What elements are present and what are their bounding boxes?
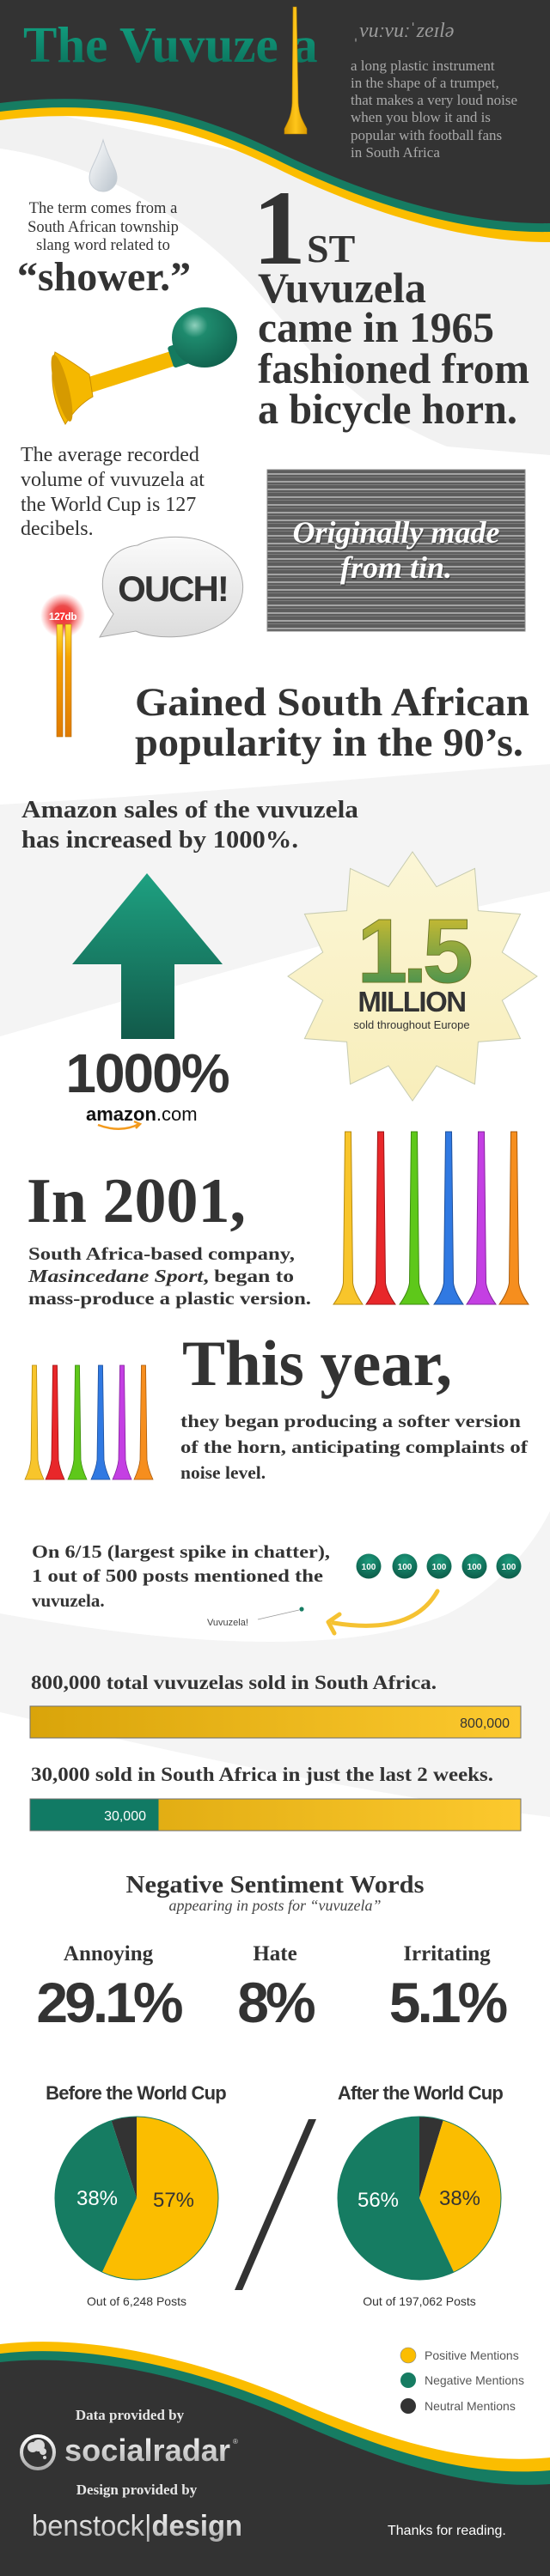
badge: 1.5 million: sold throughout Europe [353,1018,470,1031]
icon: bicycle horn [47,307,237,424]
badge: 1.5 million: 1.5 [357,901,471,1002]
text: this year [180,1328,529,1483]
text: first vuvuzela: ST [307,227,355,270]
definition: a long plastic instrument [351,58,495,74]
text: first vuvuzela: 1 [253,169,306,287]
heading: gained popularity [135,680,529,765]
stats: sentiment words: Irritating [403,1942,491,1965]
legend: Positive Mentions [425,2348,519,2362]
text: 6/15 spike: vuvuzela. [32,1590,105,1611]
text: amazon sales: has increased by 1000%. [21,827,298,854]
heading: negative sentiment words: Negative Sentiment Words [125,1871,425,1899]
text: first vuvuzela: fashioned from [258,344,529,392]
text: this year: of the horn, anticipating complaints of [180,1437,529,1457]
definition [351,20,517,161]
text: amazon sales: Amazon sales of the vuvuzela [21,797,358,823]
text: average volume [21,444,205,540]
bar chart: 800,000 total: 800,000 total vuvuzelas sold in South Africa. [31,1672,437,1693]
definition: when you blow it and is [351,109,491,125]
text: average volume: the World Cup is 127 [21,494,196,516]
icon: six colored vuvuzelas [333,1132,529,1304]
text: shower origin: The term comes from a [29,200,177,217]
badge: 1.5 million [288,852,537,1101]
definition: in the shape of a trumpet, [351,75,499,91]
panel: originally made from tin [267,470,525,631]
icon: socialradar logo [21,2436,54,2469]
icon: 100-post coins: 100 [432,1563,447,1572]
icon: decibel meter [40,593,85,737]
text: 6/15 spike: On 6/15 (largest spike in chatter), [32,1541,330,1562]
text: in 2001: In 2001, [27,1166,246,1236]
stats: sentiment words: 29.1% [36,1971,182,2034]
definition: in South Africa [351,144,440,161]
panel: originally made from tin: Originally made [292,515,500,550]
text: shower origin: South African township [28,219,179,236]
stats: sentiment words: 8% [237,1971,315,2034]
text: in 2001: mass-produce a plastic version. [28,1288,311,1309]
text: 6/15 spike: 1 out of 500 posts mentioned the [32,1565,323,1586]
title [23,7,318,134]
icon: small colored vuvuzelas [25,1365,153,1479]
footer: data credit socialradar [21,2407,238,2469]
callout: vuvuzela dot: Vuvuzela! [207,1618,248,1628]
pie chart: after the world cup [338,2082,503,2308]
badge: 1.5 million: MILLION [358,986,466,1018]
text: in 2001: Masincedane Sport , began to [28,1266,294,1286]
pie chart: after the world cup: Out of 197,062 Posts [363,2294,476,2308]
pie chart: before the world cup: Before the World Cup [46,2082,226,2104]
icon: 100-post coins: 100 [468,1563,482,1572]
bar chart: 30,000 last 2 weeks [30,1764,521,1831]
pie chart: before the world cup: Out of 6,248 Posts [87,2294,186,2308]
definition: popular with football fans [351,127,502,143]
stat: 1000% amazon: 1000% [65,1042,229,1104]
footer band [0,2342,550,2576]
pie chart: after the world cup: After the World Cup [338,2082,503,2104]
footer: design credit benstock: benstock|design [32,2510,242,2543]
footer: design credit benstock [32,2482,242,2543]
panel: originally made from tin: from tin. [340,550,452,585]
legend: Negative Mentions [425,2373,524,2387]
text: shower origin [17,200,191,300]
panel: originally made from tin: Originally made [294,517,501,551]
legend: Neutral Mentions [425,2399,516,2413]
bar chart: 30,000 last 2 weeks: 30,000 sold in South Africa in just the last 2 weeks. [31,1764,493,1785]
stats: sentiment words: Annoying [64,1942,154,1965]
text: this year: This year, [182,1328,452,1400]
definition: that makes a very loud noise [351,92,517,108]
footer: data credit socialradar: Data provided by [76,2407,185,2423]
heading: negative sentiment words: appearing in posts for “vuvuzela” [168,1897,382,1914]
panel: originally made from tin: from tin. [341,552,453,586]
icon: 100-post coins: 100 [398,1563,412,1572]
icon: water drop [89,140,117,191]
text: average volume: volume of vuvuzela at [21,469,205,491]
pie chart: before the world cup [46,2082,226,2308]
bar chart: 30,000 last 2 weeks: 30,000 [104,1809,146,1824]
text: shower origin: “shower.” [17,254,191,300]
stats: sentiment words: Hate [253,1942,297,1965]
callout: OUCH speech bubble: OUCH! [118,568,228,609]
footer: data credit socialradar: ® [233,2438,238,2445]
bar chart: 800,000 total: 800,000 [460,1716,510,1731]
header band [0,0,550,242]
callout: OUCH speech bubble [100,537,243,637]
footer: data credit socialradar: socialradar [64,2433,230,2468]
text: amazon sales [21,797,358,854]
heading: gained popularity: Gained South African [135,680,529,725]
text: first vuvuzela: a bicycle horn. [258,385,517,433]
icon: 100-post coins: 100 [502,1563,516,1572]
heading: gained popularity: popularity in the 90’s. [135,720,523,765]
pie chart: after the world cup: 38% [439,2187,480,2210]
text: first vuvuzela [253,169,529,433]
definition: ˌvuːvuːˈzeɪlə [352,20,454,42]
icon: 100-post coins: 100 [362,1563,376,1572]
legend [400,2348,524,2414]
text: 6/15 spike [32,1541,330,1611]
text: this year: they began producing a softer version [180,1411,521,1431]
text: this year: noise level. [180,1462,266,1483]
title: The Vuvuzela [23,16,318,73]
text: first vuvuzela: Vuvuzela [258,264,426,312]
text: average volume: The average recorded [21,444,199,466]
pie chart: before the world cup: 38% [76,2187,118,2210]
stat: 1000% amazon: amazon.com [86,1103,198,1125]
pie chart: before the world cup: 57% [153,2189,194,2212]
text: in 2001: South Africa-based company, [28,1243,295,1264]
callout: vuvuzela dot [207,1607,304,1628]
stats: sentiment words: 5.1% [389,1971,507,2034]
arrow: curved yellow [328,1591,437,1633]
icon: vuvuzela in title [284,7,307,134]
text: average volume: decibels. [21,518,94,540]
bar chart: 800,000 total [30,1672,521,1738]
text: in 2001 [27,1166,311,1309]
footer: design credit benstock: Design provided by [76,2482,198,2498]
text: shower origin: slang word related to [36,237,170,254]
icon: decibel meter: 127db [49,611,76,623]
heading: negative sentiment words [125,1871,425,1914]
footer: thanks: Thanks for reading. [388,2524,506,2538]
text: first vuvuzela: came in 1965 [258,303,494,351]
stats: sentiment words [36,1942,507,2034]
icon: up arrow [72,873,223,1039]
background swooshes [0,103,550,1817]
divider slash [235,2119,316,2290]
icon: 100-post coins [356,1554,521,1578]
pie chart: after the world cup: 56% [358,2189,399,2212]
